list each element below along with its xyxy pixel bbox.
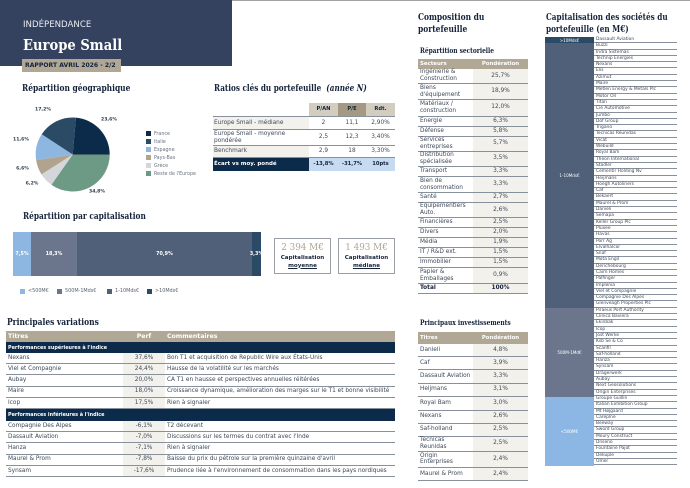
- table: principales variations: T2 décevant: [167, 423, 203, 429]
- bucket: 1-10Mds€: 1-10Mds€: [559, 173, 580, 178]
- callout: capitalisation médiane: Capitalisation: [345, 255, 388, 261]
- table: principaux investissements: Enterprises: [420, 459, 453, 465]
- column: capitalisation buckets: [545, 37, 594, 466]
- list: portfolio companies: Havas: [596, 232, 610, 237]
- table: répartition sectorielle: 3,3%: [493, 168, 508, 174]
- list: portfolio companies: Maurel & Prom: [596, 201, 628, 206]
- heading: composition du portefeuille: portefeuille: [418, 24, 467, 34]
- table: principaux investissements: Heijmans: [420, 386, 447, 392]
- header banner: [0, 0, 232, 72]
- list: portfolio companies: Porr Ag: [596, 238, 612, 244]
- list: portfolio companies: Elis: [596, 68, 604, 73]
- table: principales variations: Prudence liée à l'environnement de consommation dans les pays nordiques: [167, 468, 387, 474]
- table: répartition sectorielle: Energie: [420, 118, 442, 124]
- pie legend: [146, 131, 196, 177]
- callout: capitalisation médiane: 1 493 M€: [345, 243, 388, 253]
- table: répartition sectorielle: 6,3%: [493, 118, 508, 124]
- table: key ratios: 11,1: [346, 120, 358, 126]
- table: principales variations: -7,8%: [136, 456, 152, 462]
- table: répartition sectorielle: Immobilier: [420, 259, 451, 265]
- heading: composition du portefeuille: [418, 12, 484, 34]
- table: répartition sectorielle: Défense: [420, 128, 444, 134]
- table: key ratios: P/AN: [316, 106, 331, 112]
- pie legend: Pays-Bas: [154, 156, 175, 161]
- heading: composition du portefeuille: Composition du: [418, 12, 484, 23]
- list: portfolio companies: Glenveagh Properties Plc: [596, 301, 651, 306]
- table: principaux investissements: Caf: [420, 360, 430, 366]
- list: portfolio companies: Careplne: [596, 415, 616, 420]
- list: portfolio companies: Moury Construct: [596, 434, 632, 439]
- table: répartition sectorielle: 5,7%: [493, 140, 508, 146]
- table: principales variations: Discussions sur les termes du contrat avec l'Inde: [167, 434, 309, 440]
- table: principaux investissements: 4,8%: [493, 347, 508, 353]
- bucket: 500M-1Md€: [545, 308, 594, 397]
- table: répartition sectorielle: Transport: [420, 168, 447, 174]
- bar legend: <500M€: [28, 288, 49, 294]
- table: principales variations: Perf: [137, 333, 151, 340]
- bucket: 500M-1Md€: 500M-1Md€: [557, 350, 582, 355]
- callout: capitalisation médiane: [338, 238, 395, 274]
- list: portfolio companies: Omer: [596, 459, 608, 464]
- heading: répartition géographique: Répartition géographique: [22, 83, 130, 94]
- table: répartition sectorielle: 25,7%: [491, 73, 510, 79]
- pie legend: Reste de l'Europe: [154, 172, 196, 177]
- pie labels: 34,8%: [89, 190, 105, 194]
- list: portfolio companies: Fountaine Pajot: [596, 446, 630, 451]
- table: répartition sectorielle: d'équipement: [420, 92, 460, 98]
- list: portfolio companies: Saf-holland: [596, 352, 621, 357]
- list: portfolio companies: Scanfil: [596, 346, 611, 351]
- bucket: 1-10Mds€: [545, 43, 594, 308]
- table: principaux investissements: Dassault Aviation: [420, 373, 470, 379]
- table: principales variations: -17,6%: [134, 468, 154, 474]
- table: principaux investissements: 2,5%: [493, 440, 508, 446]
- list: portfolio companies: Mota Engil: [596, 257, 619, 262]
- table: principales variations: 20,0%: [135, 377, 153, 383]
- table: principaux investissements: 3,1%: [493, 386, 508, 392]
- table: principaux investissements: Saf-holland: [420, 426, 452, 432]
- stacked bar: capitalisation: 70,9%: [156, 252, 173, 256]
- table: répartition sectorielle: Biens: [420, 85, 436, 91]
- table: répartition sectorielle: Emballages: [420, 276, 454, 282]
- table: répartition sectorielle: 1,5%: [493, 259, 508, 265]
- list: portfolio companies: Webuild: [596, 144, 614, 149]
- table: principaux investissements: 3,0%: [493, 400, 508, 406]
- table: principaux investissements: [418, 332, 528, 481]
- list: portfolio companies: Nexans: [596, 62, 612, 67]
- table: principaux investissements: Nexans: [420, 413, 441, 419]
- table: principales variations: Performances supérieures à l'indice: [8, 344, 107, 350]
- table: principales variations: Maire: [8, 388, 24, 394]
- table: principales variations: Viel et Compagnie: [8, 366, 61, 372]
- table: key ratios: 2,5: [319, 134, 328, 140]
- callout: capitalisation moyenne: Capitalisation: [281, 255, 324, 261]
- table: répartition sectorielle: Equipementiers: [420, 203, 466, 209]
- table: principaux investissements: Titres: [420, 335, 438, 341]
- list: portfolio companies: Elvalhalcor: [596, 245, 620, 250]
- list: portfolio companies: Ekinbak: [596, 320, 613, 325]
- list: portfolio companies: Snaf: [596, 251, 606, 256]
- label: Indépendance: INDÉPENDANCE: [23, 20, 91, 30]
- table: répartition sectorielle: Distribution: [420, 152, 454, 158]
- table: répartition sectorielle: Pondération: [482, 61, 519, 67]
- table: principaux investissements: Danieli: [420, 347, 440, 353]
- table: principales variations: CA T1 en hausse et perspectives annuelles réitérées: [167, 377, 319, 383]
- callout: capitalisation moyenne: [274, 238, 331, 274]
- list: portfolio companies: Semapa: [596, 213, 614, 218]
- pie labels: 11,6%: [13, 137, 29, 142]
- table: key ratios: Rdt.: [374, 106, 387, 112]
- table: principales variations: Nexans: [8, 355, 29, 361]
- list: portfolio companies: Stadler: [596, 163, 612, 168]
- table: principales variations: Baisse du prix du pétrole sur la première quinzaine d'avril: [167, 456, 335, 462]
- table: répartition sectorielle: 100%: [492, 285, 509, 291]
- bucket: >10Mds€: >10Mds€: [560, 38, 579, 43]
- table: principaux investissements: Pondération: [482, 335, 519, 341]
- table: répartition sectorielle: consommation: [420, 184, 463, 190]
- table: répartition sectorielle: Papier &: [420, 269, 444, 275]
- table: key ratios: Europe Small - médiane: [214, 120, 283, 126]
- table: répartition sectorielle: Total: [420, 285, 436, 291]
- bucket: >10Mds€: [545, 37, 594, 43]
- table: principales variations: -7,0%: [136, 434, 152, 440]
- list: portfolio companies: Derichebourg: [596, 264, 626, 269]
- table: répartition sectorielle: Divers: [420, 229, 438, 235]
- list: portfolio companies: Azimut: [596, 75, 611, 80]
- bar legend: 1-10Mds€: [115, 288, 139, 294]
- list: portfolio companies: Jost Werke: [596, 333, 619, 338]
- pie legend: Italie: [154, 140, 166, 145]
- table: principales variations: [6, 331, 395, 477]
- table: principaux investissements: 2,4%: [493, 456, 508, 462]
- table: répartition sectorielle: Services: [420, 137, 444, 143]
- table: principaux investissements: Royal Bam: [420, 400, 451, 406]
- list: portfolio companies: Cairn Homes: [596, 270, 624, 275]
- table: key ratios: Europe Small - moyenne: [214, 131, 285, 137]
- list: portfolio companies: Dof Group: [596, 119, 618, 124]
- bucket: <500M€: [545, 397, 594, 466]
- list: portfolio companies: Cementir Holding Nv: [596, 169, 642, 174]
- stacked bar: capitalisation: 3,3%: [250, 252, 263, 256]
- list: portfolio companies: Aubay: [596, 377, 610, 382]
- list: portfolio companies: Italian Exhibition Group: [596, 402, 648, 407]
- list: portfolio companies: Pluxee: [596, 226, 611, 231]
- table: répartition sectorielle: Secteurs: [420, 61, 447, 67]
- list: portfolio companies: Technip Energies: [596, 56, 633, 61]
- table: principaux investissements: 2,6%: [493, 413, 508, 419]
- table: key ratios: 10pts: [372, 161, 389, 167]
- list: portfolio companies: Vicat: [596, 138, 607, 143]
- table: répartition sectorielle: Financières: [420, 219, 453, 225]
- table: principales variations: Bon T1 et acquisition de Republic Wire aux États-Unis: [167, 355, 323, 361]
- heading: capitalisation des sociétés: [546, 12, 668, 34]
- list: portfolio companies: Dassault Aviation: [596, 37, 634, 42]
- table: principales variations: Aubay: [8, 377, 26, 383]
- table: principales variations: Hanza: [8, 445, 26, 451]
- heading: capitalisation des sociétés: portefeuille (en M€): [546, 24, 629, 34]
- table: principaux investissements: Maurel & Prom: [420, 471, 463, 477]
- table: répartition sectorielle: 2,6%: [493, 207, 508, 213]
- table: principales variations: -7,1%: [136, 445, 152, 451]
- table: répartition sectorielle: 12,0%: [491, 104, 510, 110]
- table: principales variations: Synsam: [8, 468, 31, 474]
- table: répartition sectorielle: 2,5%: [493, 219, 508, 225]
- table: key ratios: Benchmark: [214, 148, 247, 154]
- list: portfolio companies: Buzzi: [596, 43, 608, 48]
- pie labels: 6,2%: [26, 182, 38, 186]
- pie labels: 23,6%: [101, 118, 117, 122]
- list: portfolio companies: Cie Automotive: [596, 106, 630, 111]
- list: portfolio companies: Icop: [596, 327, 605, 332]
- table: répartition sectorielle: 2,0%: [493, 229, 508, 235]
- list: portfolio companies: Trigano: [596, 125, 612, 130]
- table: répartition sectorielle: construction: [420, 108, 456, 114]
- callout: capitalisation médiane: médiane: [353, 262, 380, 268]
- table: répartition sectorielle: [418, 59, 528, 294]
- table: répartition sectorielle: 18,9%: [491, 88, 510, 94]
- list: portfolio companies: Palfinger: [596, 276, 615, 281]
- report badge: [22, 59, 121, 72]
- table: principales variations: Dassault Aviation: [8, 434, 58, 440]
- table: key ratios: 18: [348, 148, 356, 154]
- heading: ratios clés: Ratios clés du portefeuille (année N): [214, 83, 367, 94]
- table: principaux investissements: Reunidas: [420, 444, 447, 450]
- table: principales variations: Croissance dynamique, amélioration des marges sur le T1 et bonne visibilité: [167, 388, 389, 394]
- table: key ratios: 2,90%: [371, 120, 390, 126]
- list: portfolio companies: Maire: [596, 81, 608, 86]
- table: key ratios: 12,3: [346, 134, 358, 140]
- list: portfolio companies: Theon International: [596, 157, 639, 162]
- list: portfolio companies: Sword Group: [596, 427, 624, 432]
- table: principales variations: 18,0%: [135, 388, 153, 394]
- list: portfolio companies: Mt Højgaard: [596, 409, 623, 414]
- table: principales variations: Performances inférieures à l'indice: [8, 412, 104, 418]
- table: répartition sectorielle: 1,9%: [493, 239, 508, 245]
- table: répartition sectorielle: 0,9%: [493, 272, 508, 278]
- list: portfolio companies: Origin Enterprises: [596, 390, 636, 395]
- table: répartition sectorielle: 1,5%: [493, 249, 508, 255]
- table: principales variations: Hausse de la volatilité sur les marchés: [167, 366, 279, 372]
- list: portfolio companies: Bekaert: [596, 194, 613, 199]
- table: principaux investissements: 3,9%: [493, 360, 508, 366]
- bar legend: [20, 288, 178, 294]
- stacked bar: capitalisation: 7,5%: [15, 252, 29, 256]
- table: répartition sectorielle: Construction: [420, 76, 457, 82]
- list: portfolio companies: Titan: [596, 100, 607, 105]
- table: principales variations: Maurel & Prom: [8, 456, 51, 462]
- subheading: principaux investissements: Principaux investissements: [420, 318, 511, 327]
- list: portfolio companies: Ksb Se & Co: [596, 339, 623, 344]
- table: principales variations: -6,1%: [136, 423, 152, 429]
- list: portfolio companies: Dekuple: [596, 453, 614, 458]
- table: principaux investissements: 2,5%: [493, 426, 508, 432]
- list: portfolio companies: Next Geosolutions: [596, 383, 636, 388]
- bucket: <500M€: <500M€: [561, 429, 578, 434]
- list: portfolio companies: Danieli: [596, 207, 611, 212]
- table: principales variations: Commentaires: [167, 333, 217, 340]
- table: répartition sectorielle: entreprises: [420, 144, 453, 150]
- table: principaux investissements: 2,4%: [493, 471, 508, 477]
- table: key ratios: 3,40%: [371, 134, 390, 140]
- table: répartition sectorielle: Matériaux /: [420, 101, 453, 107]
- table: key ratios: Écart vs moy. pondé: [214, 161, 277, 167]
- table: répartition sectorielle: Santé: [420, 194, 437, 200]
- list: portfolio companies: Keller Group Plc: [596, 220, 631, 225]
- table: key ratios: 3,30%: [371, 148, 390, 154]
- list: portfolio companies: Royal Bam: [596, 150, 619, 155]
- table: principales variations: 24,4%: [135, 366, 153, 372]
- pie legend: Grèce: [154, 164, 168, 169]
- table: principaux investissements: Tecnicas: [420, 437, 444, 443]
- pie legend: France: [154, 132, 170, 137]
- list: portfolio companies: Beeway: [596, 421, 613, 426]
- heading: principales variations: Principales variations: [7, 317, 99, 328]
- table: principales variations: Rien à signaler: [167, 400, 210, 406]
- table: key ratios: 2: [322, 120, 325, 126]
- table: principales variations: 37,6%: [135, 355, 153, 361]
- list: portfolio companies: Indra Sistemas: [596, 50, 629, 55]
- title: Europe Small: [23, 37, 122, 54]
- list: portfolio companies: Motor Oil: [596, 94, 616, 99]
- table: principales variations: Icop: [8, 400, 20, 406]
- table: key ratios: -31,7%: [342, 161, 362, 167]
- table: répartition sectorielle: 3,5%: [493, 155, 508, 161]
- list: portfolio companies: Hanza: [596, 358, 610, 363]
- heading: capitalisation des sociétés: Capitalisation des sociétés du: [546, 12, 668, 23]
- stacked bar: capitalisation: [13, 232, 263, 276]
- list: portfolio companies: Clinica Baviera: [596, 314, 629, 319]
- pie legend: Espagne: [154, 148, 175, 153]
- list: portfolio companies: [594, 36, 677, 465]
- list: portfolio companies: Metlen Energy & Metals Plc: [596, 87, 656, 92]
- list: portfolio companies: Groupe Guillin: [596, 396, 627, 401]
- table: key ratios: pondérée: [214, 138, 242, 144]
- list: portfolio companies: Jumbo: [596, 113, 610, 118]
- pie labels: [13, 107, 117, 194]
- bar legend: >10Mds€: [155, 288, 178, 294]
- list: portfolio companies: Dnseno: [596, 440, 613, 445]
- table: répartition sectorielle: 3,3%: [493, 181, 508, 187]
- table: key ratios: 2,9: [319, 148, 328, 154]
- table: key ratios: [213, 103, 395, 171]
- pie chart: geographic breakdown: [36, 118, 110, 192]
- list: portfolio companies: Hoegh Autoliners: [596, 182, 634, 187]
- stacked bar: capitalisation: 18,3%: [46, 252, 62, 256]
- table: répartition sectorielle: Média: [420, 239, 437, 245]
- subheading: répartition sectorielle: Répartition sectorielle: [420, 46, 494, 55]
- list: portfolio companies: Viel et Compagnie: [596, 289, 636, 294]
- table: principales variations: 17,5%: [135, 400, 153, 406]
- table: principales variations: Titres: [8, 333, 28, 340]
- table: key ratios: P/E: [347, 106, 357, 112]
- table: répartition sectorielle: Ingénierie &: [420, 69, 455, 75]
- bar legend: 500M-1Mds€: [65, 288, 96, 294]
- list: portfolio companies: Compagnie Des Alpes: [596, 295, 644, 300]
- list: portfolio companies: Heijmans: [596, 176, 616, 181]
- table: répartition sectorielle: Auto.: [420, 210, 435, 216]
- list: portfolio companies: Implenia: [596, 283, 615, 288]
- callout: capitalisation moyenne: moyenne: [288, 262, 317, 268]
- callout: capitalisation moyenne: 2 394 M€: [281, 243, 324, 253]
- table: répartition sectorielle: spécialisée: [420, 159, 452, 165]
- list: portfolio companies: Piraeus Port Authority: [596, 308, 644, 313]
- table: principaux investissements: Origin: [420, 453, 438, 459]
- report badge: RAPPORT AVRIL 2026 - 2/2: [25, 62, 116, 69]
- table: principales variations: Compagnie Des Alpes: [8, 423, 72, 429]
- list: portfolio companies: Caf: [596, 188, 603, 193]
- list: portfolio companies: Drägerwerk: [596, 371, 622, 376]
- table: répartition sectorielle: 2,7%: [493, 194, 508, 200]
- list: portfolio companies: Synsam: [596, 364, 613, 369]
- table: key ratios: -13,8%: [313, 161, 334, 167]
- table: répartition sectorielle: Bien de: [420, 178, 442, 184]
- table: principaux investissements: 3,3%: [493, 373, 508, 379]
- table: principales variations: Rien à signaler: [167, 445, 210, 451]
- pie labels: 6,6%: [16, 166, 29, 172]
- table: répartition sectorielle: IT / R&D ext.: [420, 249, 457, 255]
- pie labels: 17,2%: [35, 107, 51, 112]
- table: répartition sectorielle: 5,8%: [493, 128, 508, 134]
- heading: répartition par capitalisation: Répartition par capitalisation: [23, 211, 146, 222]
- list: portfolio companies: Tecnicas Reunidas: [596, 131, 636, 136]
